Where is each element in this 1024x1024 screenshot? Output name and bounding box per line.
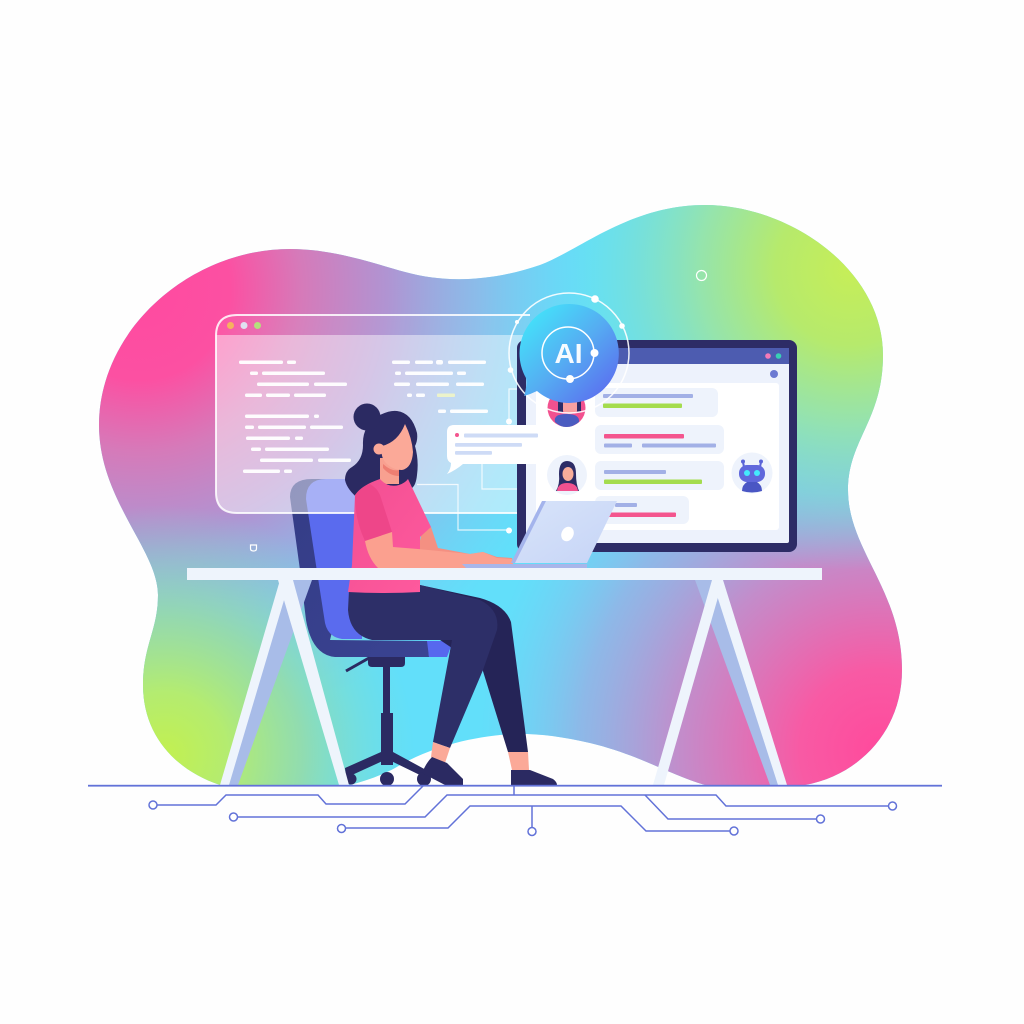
trace 4 bbox=[531, 806, 533, 827]
avatar: robot bbox=[732, 452, 772, 494]
monitor screen bbox=[526, 348, 789, 543]
chair back shadow bbox=[290, 479, 429, 657]
seat front edge bbox=[427, 641, 453, 657]
back leg bbox=[420, 585, 528, 752]
chair stem bbox=[383, 666, 390, 714]
arm bbox=[365, 532, 513, 568]
AI speech badge bbox=[508, 293, 629, 413]
laptop logo bbox=[559, 525, 576, 543]
trace 5 bbox=[645, 795, 816, 819]
AI label: AI bbox=[554, 338, 582, 369]
chair wheels bbox=[346, 772, 431, 786]
window control dots bbox=[227, 322, 261, 329]
trace 2 bbox=[238, 795, 888, 817]
orbit nodes bbox=[508, 295, 625, 383]
hair bun bbox=[354, 404, 380, 430]
left leg right white bbox=[278, 580, 349, 785]
face bbox=[381, 424, 413, 470]
chair bbox=[290, 479, 453, 786]
chair piston bbox=[381, 713, 393, 765]
left leg blue shade bbox=[229, 580, 312, 785]
far arm bbox=[418, 527, 513, 564]
front ankle bbox=[431, 742, 450, 763]
desk legs bbox=[220, 580, 787, 785]
inner ring bbox=[542, 327, 594, 379]
title bar dots bbox=[765, 353, 781, 359]
avatar: woman bbox=[547, 455, 587, 495]
chat monitor panel bbox=[517, 340, 797, 552]
code lines bbox=[239, 360, 488, 473]
woman at laptop bbox=[345, 404, 557, 785]
chat message 1 bbox=[595, 388, 718, 417]
terminal nodes bbox=[149, 801, 896, 836]
floating speech bubble bbox=[447, 425, 538, 474]
trace 1 bbox=[157, 786, 423, 805]
chat message 2 bbox=[595, 425, 724, 454]
right leg blue shade bbox=[695, 580, 779, 785]
neck shadow bbox=[383, 464, 399, 476]
avatar: top woman bbox=[548, 389, 586, 427]
left leg front white bbox=[220, 580, 290, 785]
right leg right white bbox=[712, 580, 787, 785]
laptop bbox=[462, 501, 617, 568]
front leg bbox=[348, 585, 497, 748]
trace 3 bbox=[346, 806, 730, 831]
back ankle bbox=[508, 752, 529, 770]
laptop lid rim bbox=[511, 501, 548, 563]
adjust lever bbox=[346, 658, 369, 671]
sleeve bbox=[355, 484, 392, 541]
hair back bbox=[345, 411, 418, 500]
window glass body bbox=[216, 335, 530, 513]
ear bbox=[374, 444, 384, 454]
chair star base bbox=[345, 752, 428, 778]
chair back panel bbox=[306, 479, 362, 639]
connector nodes bbox=[506, 418, 512, 534]
connector lines bbox=[417, 389, 517, 530]
seat base bbox=[368, 657, 405, 667]
chat message 3 bbox=[595, 461, 724, 490]
search icon bbox=[770, 370, 778, 378]
laptop base bbox=[462, 564, 587, 568]
laptop lid bbox=[515, 501, 617, 563]
desk top bbox=[187, 568, 822, 580]
code window panel bbox=[216, 315, 530, 551]
right leg left white bbox=[653, 580, 723, 785]
gradient blob background bbox=[80, 190, 920, 800]
monitor title bar bbox=[526, 348, 789, 364]
window title bar bbox=[216, 315, 530, 335]
small mug icon bbox=[250, 545, 256, 551]
badge bubble bbox=[520, 304, 619, 403]
back shoe bbox=[511, 770, 557, 785]
white chat area bbox=[536, 383, 779, 530]
chat message 4 bbox=[595, 496, 689, 524]
front shoe bbox=[422, 757, 463, 785]
outer orbit ring bbox=[509, 293, 629, 413]
small floating ring bbox=[696, 270, 706, 280]
shirt bbox=[348, 479, 431, 593]
neck bbox=[380, 458, 399, 484]
trunk junction bbox=[513, 786, 515, 795]
monitor frame bbox=[517, 340, 797, 552]
circuit traces bbox=[149, 786, 896, 836]
circuit baseline bbox=[88, 785, 942, 787]
window frame bbox=[216, 315, 530, 513]
